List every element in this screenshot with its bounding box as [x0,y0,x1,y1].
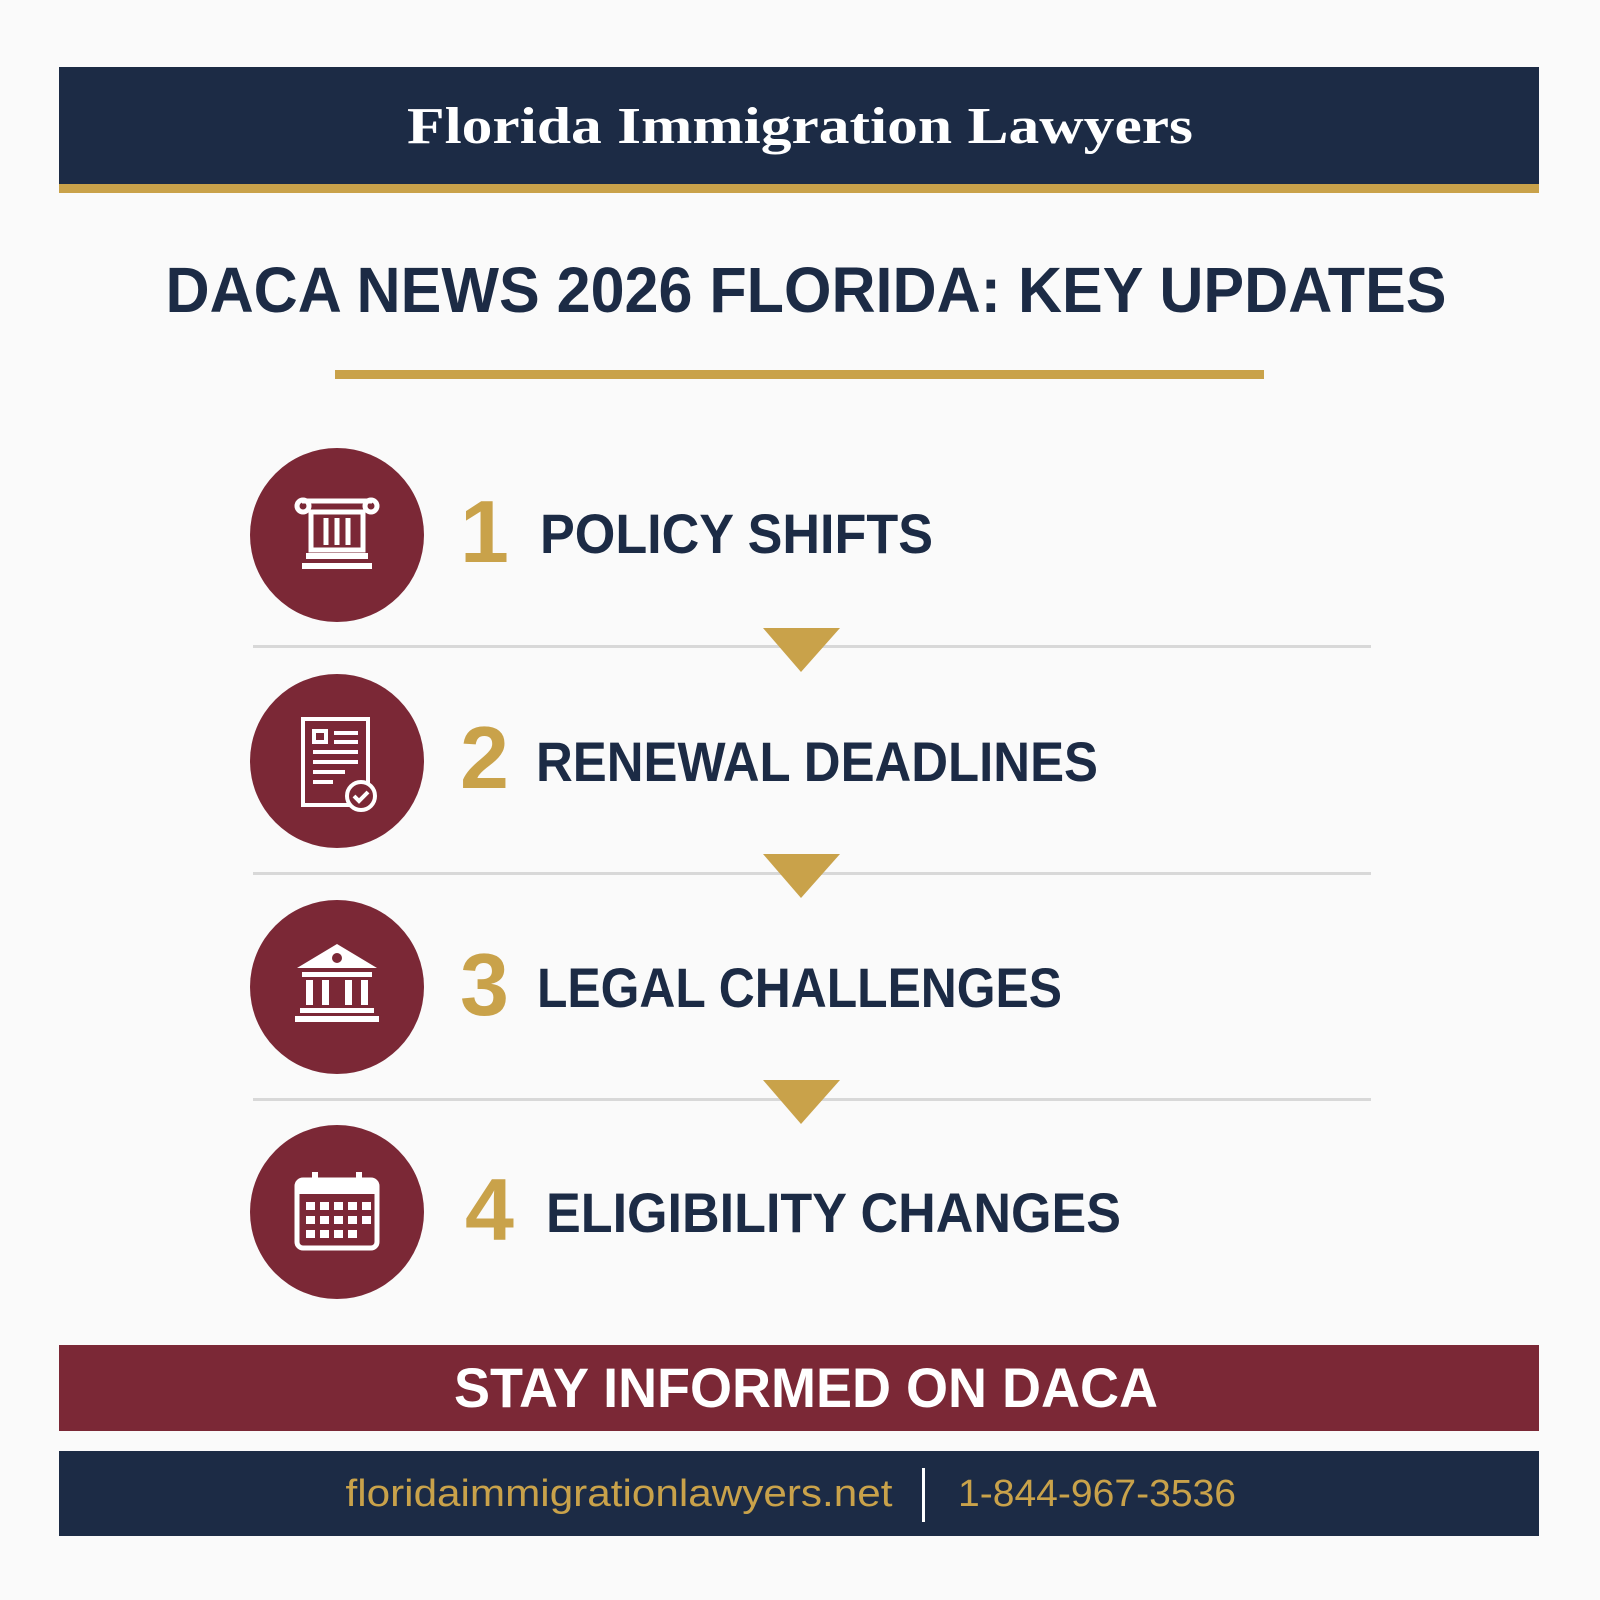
icon: document with check [303,719,375,810]
item 2: renewal deadlines: 2 [460,708,509,807]
item 1: policy shifts [250,448,933,622]
icon: calendar [297,1172,377,1248]
banner: stay informed [59,1345,1539,1431]
header bar: Florida Immigration Lawyers [407,98,1193,155]
header bar [59,67,1539,193]
item 3: legal challenges [250,900,1062,1074]
arrow 1 [763,628,840,672]
item 4: eligibility changes: 4 [465,1160,514,1259]
item 3: legal challenges: LEGAL CHALLENGES [537,956,1062,1019]
item 4: eligibility changes: ELIGIBILITY CHANGES [546,1181,1121,1244]
banner: stay informed: STAY INFORMED ON DACA [454,1356,1158,1419]
title underline [335,370,1264,379]
item 2: renewal deadlines [250,674,1098,848]
arrow 2 [763,854,840,898]
icon: courthouse [295,944,379,1022]
item 2: renewal deadlines: RENEWAL DEADLINES [536,730,1098,793]
footer: contact: 1-844-967-3536 [958,1473,1236,1515]
title: DACA NEWS 2026 FLORIDA: KEY UPDATES [166,254,1446,326]
arrow 3 [763,1080,840,1124]
icon: column [297,500,377,566]
footer: contact [59,1451,1539,1536]
footer: contact: floridaimmigrationlawyers.net [346,1473,893,1515]
item 1: policy shifts: POLICY SHIFTS [540,502,933,565]
item 1: policy shifts: 1 [460,482,509,581]
item 4: eligibility changes [250,1125,1121,1299]
divider lines and arrows [253,645,1371,1101]
item 3: legal challenges: 3 [460,935,509,1034]
